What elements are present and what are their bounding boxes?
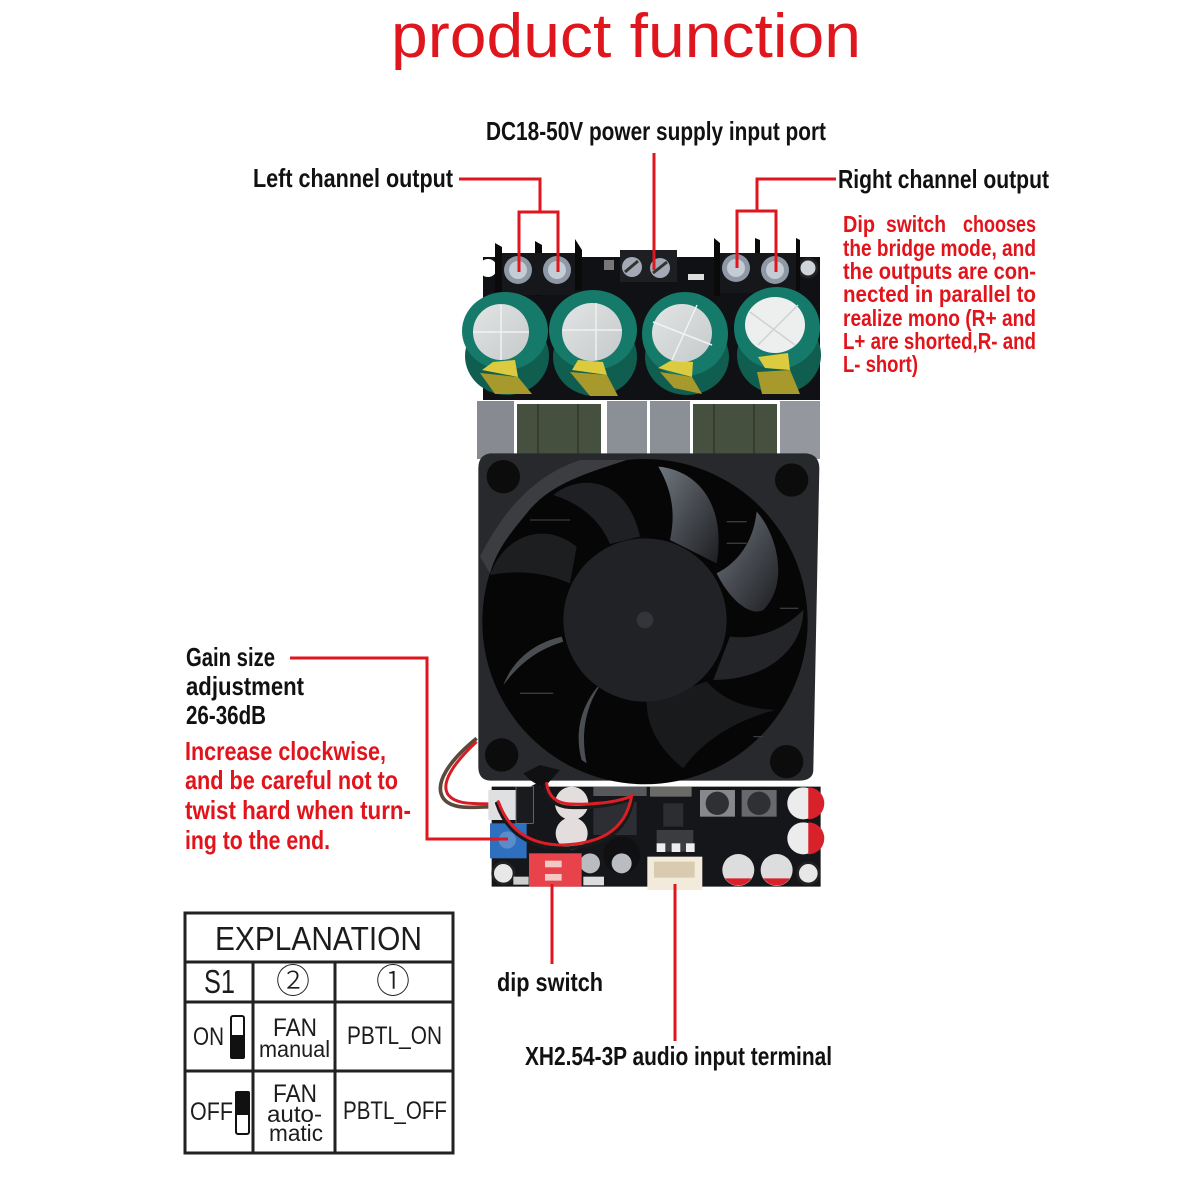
- text block: bridge mode note: realize mono (R+ and: [843, 305, 1036, 331]
- text block: bridge mode note: the bridge mode, and: [843, 235, 1036, 261]
- explanation table: matic: [269, 1120, 323, 1146]
- explanation table: auto-: [267, 1101, 322, 1127]
- terminal block: right: [714, 238, 800, 296]
- terminal block: left: [495, 239, 582, 296]
- text block: gain warning: and be careful not to: [185, 765, 398, 795]
- explanation table: ①: [376, 954, 410, 1003]
- fan wire loop: [440, 738, 492, 807]
- explanation table: manual: [259, 1036, 330, 1062]
- label: gain adjustment: adjustment: [186, 671, 304, 701]
- fan screws: [487, 460, 520, 493]
- dip switch: [529, 853, 582, 887]
- product photo: amplifier board: [440, 238, 824, 890]
- heatsink fins: [520, 520, 798, 737]
- capacitors: [462, 287, 821, 396]
- explanation table: PBTL_ON: [347, 1022, 442, 1050]
- explanation table: EXPLANATION: [215, 920, 422, 957]
- top PCB: [483, 257, 820, 400]
- text block: gain warning: ing to the end.: [185, 825, 330, 855]
- title: product function: [391, 2, 861, 71]
- label: dip switch: dip switch: [497, 967, 603, 997]
- explanation table: ON: [193, 1023, 224, 1051]
- explanation table: PBTL_OFF: [343, 1097, 447, 1125]
- text block: bridge mode note: chooses: [963, 211, 1036, 237]
- label: gain adjustment: [186, 642, 304, 730]
- terminal block: power: [604, 250, 704, 282]
- label: gain adjustment: 26-36dB: [186, 700, 266, 730]
- board wires: [497, 783, 633, 848]
- RGL markers: [657, 843, 665, 852]
- explanation table: FAN: [273, 1080, 317, 1108]
- fan blades: [553, 483, 640, 544]
- text block: bridge mode note: [843, 211, 1036, 377]
- right capacitors: [787, 787, 819, 819]
- label: left channel output: Left channel output: [253, 163, 453, 193]
- text block: bridge mode note: nected in parallel to: [843, 281, 1036, 307]
- label: gain adjustment: Gain size: [186, 642, 275, 672]
- text block: gain warning: [185, 736, 411, 855]
- text block: bridge mode note: L- short): [843, 351, 918, 377]
- icon: switch on: [230, 1016, 245, 1059]
- lower control board: [440, 738, 824, 890]
- label: audio input terminal: XH2.54-3P audio input terminal: [525, 1041, 832, 1071]
- text block: gain warning: Increase clockwise,: [185, 736, 386, 766]
- leader lines: [290, 153, 836, 1041]
- audio connector: [647, 857, 702, 890]
- label: right channel output: Right channel output: [838, 164, 1049, 194]
- icon: switch off: [235, 1091, 250, 1134]
- text block: bridge mode note: L+ are shorted,R- and: [843, 328, 1036, 354]
- text block: bridge mode note: Dip: [843, 211, 875, 237]
- fan: [478, 453, 819, 784]
- small capacitors: [555, 787, 588, 820]
- text block: gain warning: twist hard when turn-: [185, 795, 411, 825]
- explanation table: S1: [204, 963, 235, 1000]
- inductors: [700, 790, 735, 817]
- explanation table: [185, 913, 453, 1153]
- inductors row: [477, 400, 820, 460]
- text block: bridge mode note: the outputs are con-: [843, 258, 1036, 284]
- explanation table: OFF: [190, 1098, 233, 1126]
- explanation table: FAN: [273, 1014, 317, 1042]
- text block: bridge mode note: switch: [886, 211, 946, 237]
- label: power supply port: DC18-50V power supply input port: [486, 116, 826, 146]
- explanation table: ②: [276, 954, 310, 1003]
